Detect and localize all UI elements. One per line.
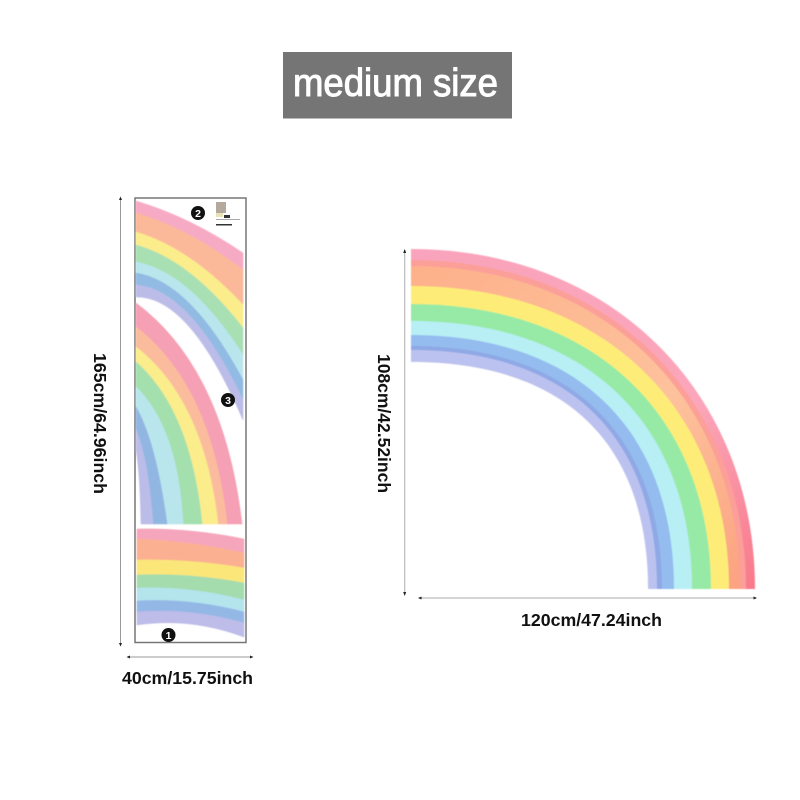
inner cut-out: [411, 362, 648, 589]
rainbow piece 3: [136, 303, 242, 524]
rainbow piece 2: [136, 201, 243, 420]
title banner: medium size: [293, 62, 498, 105]
rainbow piece 1: [137, 529, 244, 637]
number badge 1: 1: [166, 630, 172, 642]
band: dark blue edge: [411, 346, 662, 589]
number badge 2: [191, 206, 205, 220]
title banner: [283, 52, 512, 118]
panel: packaged sheet with three rainbow pieces: [135, 198, 246, 642]
number badge 1: [162, 628, 176, 642]
product label thumbnail: [215, 201, 242, 228]
arrow: sheet width: [126, 656, 254, 658]
arrow: rainbow height: [403, 249, 406, 596]
label: sheet width: 40cm/15.75inch: [122, 668, 253, 688]
band: orange: [411, 266, 740, 589]
band: blue: [411, 335, 674, 589]
arrow: sheet height: [119, 196, 122, 646]
band: yellow: [411, 286, 729, 589]
number badge 2: 2: [195, 208, 201, 220]
chart: assembled rainbow: [411, 249, 755, 589]
band: purple: [411, 350, 657, 589]
band: pink: [411, 249, 755, 589]
label: rainbow width: 120cm/47.24inch: [521, 610, 662, 630]
label: sheet height: 165cm/64.96inch: [90, 353, 110, 494]
band: green: [411, 304, 711, 589]
band: salmon edge: [411, 260, 746, 589]
arrow: rainbow width: [418, 596, 757, 600]
label: rainbow height: 108cm/42.52inch: [374, 354, 394, 493]
band: cyan: [411, 321, 692, 589]
number badge 3: 3: [225, 395, 231, 407]
sheet outline: [135, 198, 246, 642]
number badge 3: [221, 393, 235, 407]
